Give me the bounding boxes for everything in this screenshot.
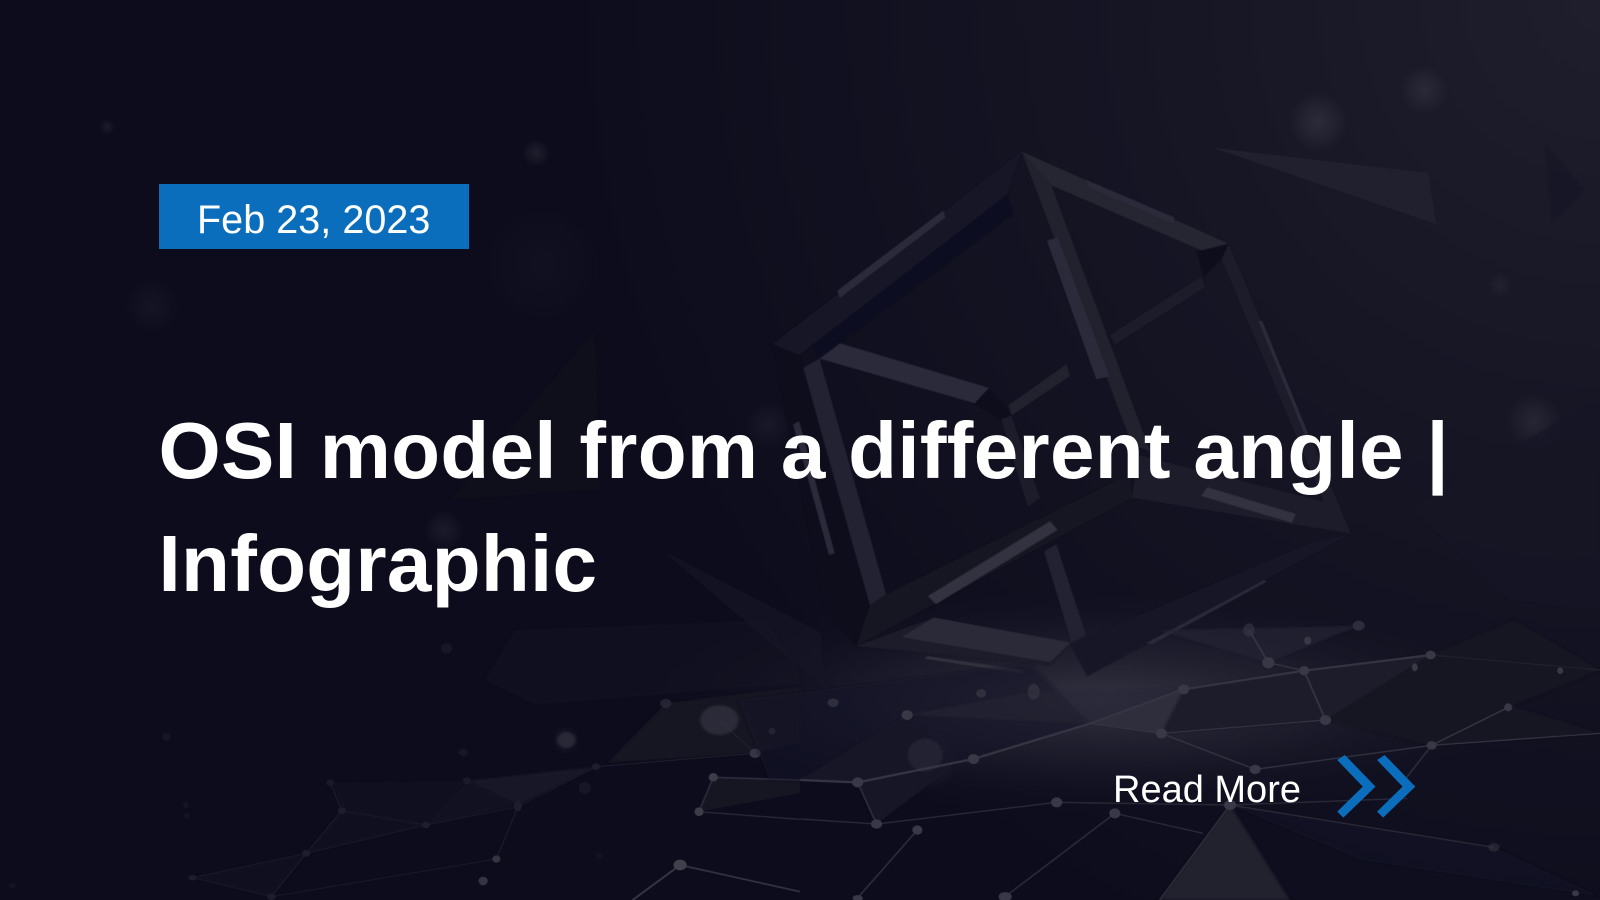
title <box>158 406 1449 608</box>
read more text: Read More <box>1113 769 1301 811</box>
top right shard <box>1214 148 1436 224</box>
icon: double chevron arrow <box>1337 755 1416 818</box>
faint shards <box>450 145 1600 689</box>
title: Infographic <box>158 519 597 608</box>
network left half <box>9 620 800 900</box>
read more link <box>1113 755 1416 818</box>
date badge <box>159 184 469 249</box>
network right half <box>739 620 1600 900</box>
date text: Feb 23, 2023 <box>197 198 430 242</box>
cube graphic <box>773 151 1351 676</box>
cube highlights <box>793 180 1311 674</box>
title: OSI model from a different angle | <box>158 406 1449 495</box>
network nodes near centre <box>479 687 800 900</box>
soft glow particles <box>99 66 1562 790</box>
